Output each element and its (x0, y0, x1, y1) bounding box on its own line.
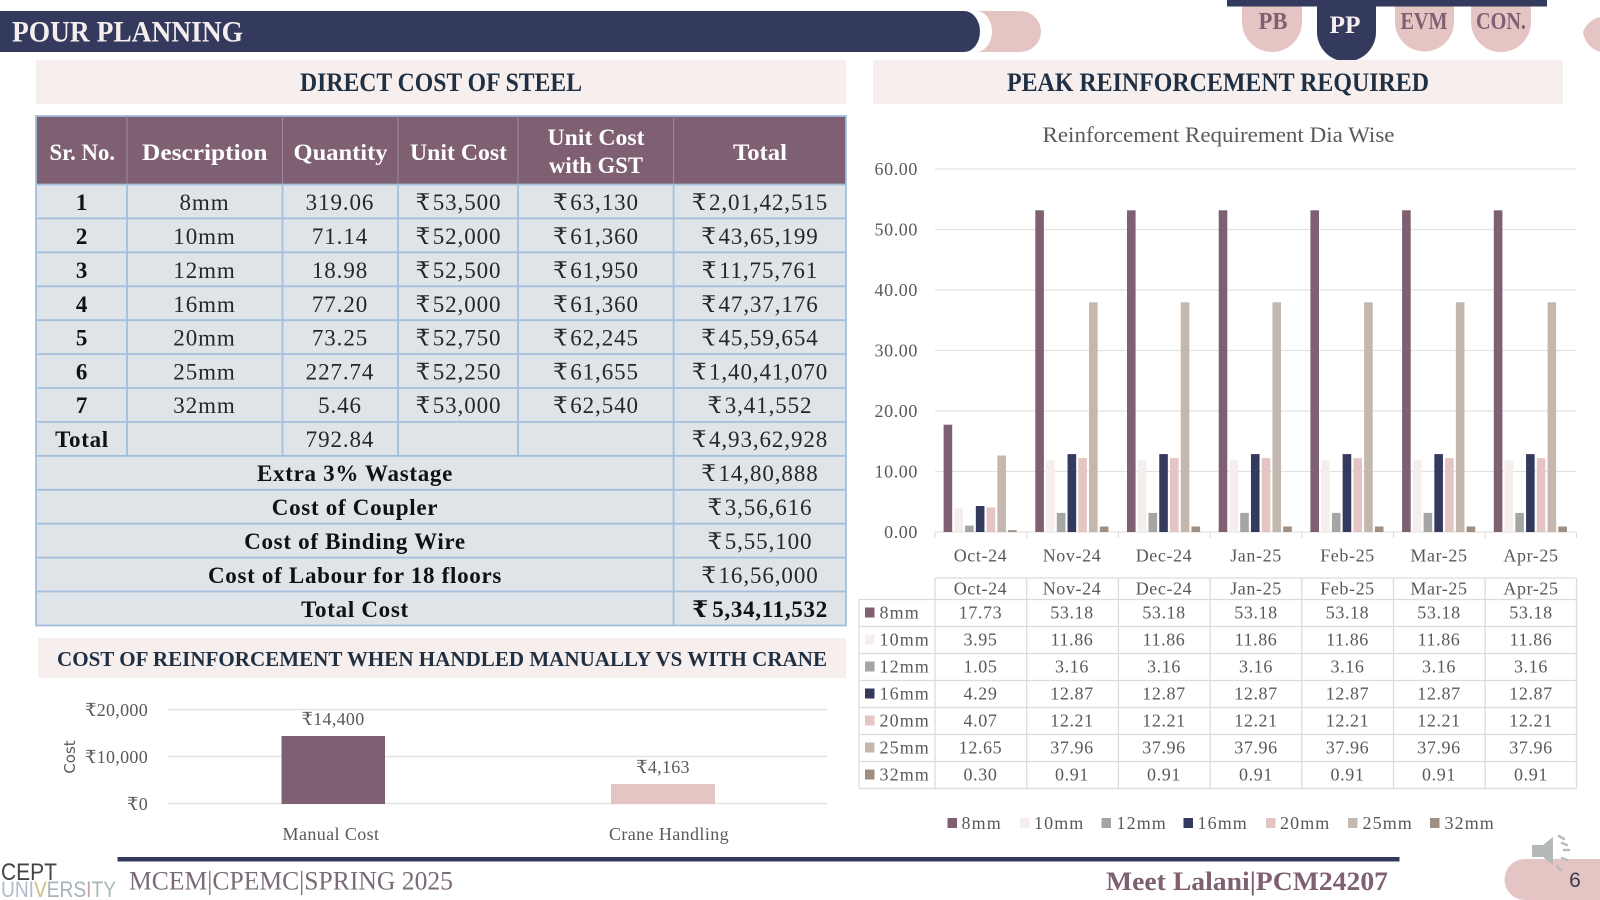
y axis labels: 0.00 (884, 522, 918, 542)
x axis labels (954, 546, 1559, 566)
labour row (208, 563, 819, 588)
heading: peak reinforcement required: PEAK REINFORCEMENT REQUIRED (1007, 68, 1429, 97)
navigation tabs: EVM (1400, 9, 1448, 35)
32mm row: 0.91 (1514, 764, 1548, 784)
row 1: ₹ 2,01,42,515 (692, 190, 828, 215)
bars Oct-24 (944, 425, 1017, 532)
row 3: ₹ 61,950 (553, 258, 639, 283)
16mm row: 4.29 (964, 684, 997, 704)
bars Dec-24 (1127, 210, 1200, 532)
category labels: Crane Handling (609, 824, 729, 844)
x axis labels: Dec-24 (1136, 546, 1192, 566)
total row: Total (55, 427, 109, 452)
25mm row: 12.65 (959, 738, 1002, 758)
32mm row: 0.91 (1331, 764, 1364, 784)
row 4: 77.20 (312, 292, 368, 317)
bar chart: manual vs crane cost (61, 700, 827, 844)
row 7: ₹ 3,41,552 (708, 393, 812, 418)
x axis labels: Feb-25 (1320, 546, 1375, 566)
x axis labels: Apr-25 (1503, 546, 1559, 566)
25mm row: 37.96 (1326, 738, 1369, 758)
row 2: ₹ 43,65,199 (701, 224, 819, 249)
y axis labels: 30.00 (874, 340, 918, 360)
row 5: ₹ 62,245 (553, 326, 639, 350)
page number pill: 6 (1569, 869, 1581, 892)
8mm row: 53.18 (1417, 602, 1461, 622)
row 4: ₹ 52,000 (416, 292, 501, 317)
x axis labels: Mar-25 (1410, 546, 1468, 566)
12mm row: 1.05 (964, 656, 997, 676)
heading: manual vs crane: COST OF REINFORCEMENT WHEN HANDLED MANUALLY VS WITH CRANE (57, 647, 827, 671)
table header row: Unit Cost (548, 125, 645, 150)
chart legend: 10mm (1034, 813, 1084, 833)
title bar: POUR PLANNING (12, 16, 243, 48)
axis labels: ₹10,000 (85, 747, 148, 767)
16mm row: 12.87 (1417, 684, 1461, 704)
y axis labels: 60.00 (874, 159, 918, 179)
25mm row: 37.96 (1234, 738, 1278, 758)
title bar (0, 11, 1041, 52)
table header row: Total (733, 140, 787, 165)
row 2 (76, 224, 819, 249)
heading: direct cost of steel (36, 60, 846, 104)
data table header: Oct-24 (954, 578, 1007, 598)
row 3: ₹ 11,75,761 (702, 258, 818, 283)
data labels: ₹4,163 (636, 757, 690, 777)
20mm row: 12.21 (1417, 710, 1461, 730)
32mm row: 0.91 (1055, 764, 1089, 784)
extra wastage row (257, 461, 819, 486)
axis labels: ₹20,000 (85, 700, 148, 720)
table: direct cost of steel (36, 116, 846, 626)
25mm row: 37.96 (1509, 738, 1553, 758)
10mm row: 11.86 (1051, 630, 1093, 650)
8mm row: 8mm (880, 602, 920, 622)
navigation tabs: PB (1258, 9, 1288, 35)
icon: speaker (1532, 836, 1569, 870)
binding wire row (244, 529, 812, 554)
row 6: ₹ 61,655 (553, 360, 639, 384)
16mm row: 12.87 (1509, 684, 1553, 704)
16mm row: 12.87 (1142, 684, 1186, 704)
navigation tabs: CON. (1476, 9, 1526, 35)
heading: manual vs crane (38, 638, 846, 678)
page number pill (1504, 859, 1600, 900)
chart legend: 8mm (962, 813, 1002, 833)
10mm row: 10mm (880, 630, 930, 650)
25mm row: 37.96 (1142, 738, 1186, 758)
table header row: Description (142, 140, 268, 165)
25mm row (865, 738, 1553, 758)
category labels (283, 824, 729, 844)
8mm row: 17.73 (959, 602, 1002, 622)
32mm row: 0.30 (964, 764, 997, 784)
chart legend: 25mm (1362, 813, 1413, 833)
12mm row: 3.16 (1331, 656, 1364, 676)
12mm row: 12mm (880, 656, 930, 676)
32mm row: 0.91 (1147, 764, 1181, 784)
8mm row: 53.18 (1509, 602, 1553, 622)
total cost row (301, 597, 828, 622)
16mm row: 12.87 (1050, 684, 1094, 704)
row 6: 227.74 (306, 360, 374, 384)
row 4: ₹ 47,37,176 (701, 292, 819, 317)
data table header: Mar-25 (1410, 578, 1468, 598)
x axis labels: Nov-24 (1043, 546, 1101, 566)
total cost row: Total Cost (301, 597, 409, 622)
row 4: 4 (76, 292, 88, 317)
logo: CEPT University: CEPT (1, 859, 57, 886)
table header row: Sr. No. (50, 140, 115, 165)
row 6: 25mm (173, 360, 236, 384)
20mm row: 12.21 (1234, 710, 1278, 730)
data table header: Dec-24 (1136, 578, 1192, 598)
row 4: ₹ 61,360 (553, 292, 639, 317)
row 2: 71.14 (312, 224, 368, 249)
row 4 (76, 292, 819, 317)
row 2: 2 (76, 224, 88, 249)
8mm row: 53.18 (1050, 602, 1094, 622)
10mm row: 11.86 (1235, 630, 1277, 650)
row 3: 18.98 (312, 258, 368, 283)
10mm row: 3.95 (964, 630, 997, 650)
row 5: ₹ 45,59,654 (701, 326, 819, 350)
25mm row: 37.96 (1050, 738, 1094, 758)
row 5 (76, 326, 819, 350)
data table header (954, 578, 1559, 598)
binding wire row: ₹ 5,55,100 (708, 529, 812, 554)
row 1: ₹ 53,500 (416, 190, 501, 215)
bars Apr-25 (1494, 210, 1567, 532)
row 3: 12mm (173, 258, 236, 283)
bars Mar-25 (1402, 210, 1475, 532)
binding wire row: Cost of Binding Wire (244, 529, 466, 554)
bars Jan-25 (1219, 210, 1292, 532)
chart legend: 12mm (1116, 813, 1167, 833)
32mm row: 32mm (880, 764, 930, 784)
row 6: ₹ 1,40,41,070 (692, 360, 828, 384)
row 3: ₹ 52,500 (416, 258, 501, 283)
20mm row: 12.21 (1142, 710, 1186, 730)
8mm row (865, 602, 1553, 622)
20mm row: 12.21 (1326, 710, 1369, 730)
16mm row: 12.87 (1326, 684, 1369, 704)
row 5: 20mm (173, 326, 236, 350)
row 7: ₹ 53,000 (416, 393, 501, 418)
12mm row: 3.16 (1422, 656, 1456, 676)
row 2: ₹ 61,360 (553, 224, 639, 249)
y axis labels: 50.00 (874, 220, 918, 240)
footer rule (118, 857, 1400, 862)
16mm row: 12.87 (1234, 684, 1278, 704)
chart title: Reinforcement Requirement Dia Wise (1042, 122, 1394, 147)
12mm row: 3.16 (1147, 656, 1181, 676)
chart legend: 20mm (1280, 813, 1330, 833)
total row (55, 427, 828, 452)
y axis labels (874, 159, 918, 542)
20mm row: 12.21 (1509, 710, 1553, 730)
10mm row: 11.86 (1418, 630, 1460, 650)
navigation tabs: PP (1330, 12, 1360, 39)
16mm row (865, 684, 1553, 704)
row 6: 6 (76, 360, 88, 384)
row 7: 32mm (173, 393, 236, 418)
coupler row (272, 495, 812, 520)
extra wastage row: Extra 3% Wastage (257, 461, 453, 486)
32mm row: 0.91 (1239, 764, 1273, 784)
table header row: Unit Cost (410, 140, 507, 165)
data table header: Nov-24 (1043, 578, 1101, 598)
chart legend: 32mm (1444, 813, 1495, 833)
table header row: Quantity (294, 140, 388, 165)
25mm row: 25mm (880, 738, 930, 758)
row 7: 7 (76, 393, 88, 418)
10mm row: 11.86 (1143, 630, 1185, 650)
row 3: 3 (76, 258, 88, 283)
x axis labels: Jan-25 (1230, 546, 1282, 566)
20mm row: 12.21 (1050, 710, 1094, 730)
data table header: Jan-25 (1230, 578, 1282, 598)
row 7: ₹ 62,540 (553, 393, 639, 418)
table header row: with GST (549, 153, 643, 178)
row 7: 5.46 (318, 393, 362, 418)
category labels: Manual Cost (283, 824, 379, 844)
row 2: 10mm (173, 224, 236, 249)
y axis labels: 10.00 (874, 462, 918, 482)
8mm row: 53.18 (1234, 602, 1278, 622)
row 1: 1 (76, 190, 88, 215)
10mm row: 11.86 (1326, 630, 1369, 650)
labour row: Cost of Labour for 18 floors (208, 563, 502, 588)
data labels (301, 709, 690, 777)
row 6 (76, 360, 828, 384)
x axis labels: Oct-24 (954, 546, 1007, 566)
extra wastage row: ₹ 14,80,888 (701, 461, 819, 486)
row 2: ₹ 52,000 (416, 224, 501, 249)
bar: crane handling (611, 784, 715, 804)
row 1: ₹ 63,130 (553, 190, 639, 215)
20mm row (865, 710, 1553, 730)
logo: CEPT University (1, 859, 116, 900)
coupler row: Cost of Coupler (272, 495, 438, 520)
row 1 (76, 190, 828, 215)
12mm row: 3.16 (1239, 656, 1273, 676)
axis labels: ₹0 (127, 794, 148, 814)
total row: ₹ 4,93,62,928 (692, 427, 828, 452)
data labels: ₹14,400 (301, 709, 365, 729)
row 6: ₹ 52,250 (416, 360, 501, 384)
data table header: Apr-25 (1503, 578, 1559, 598)
row 1: 8mm (180, 190, 229, 215)
10mm row (865, 630, 1552, 650)
axis labels (85, 700, 148, 814)
bars Feb-25 (1310, 210, 1384, 532)
row 3 (76, 258, 818, 283)
16mm row: 16mm (880, 684, 930, 704)
heading: direct cost of steel: DIRECT COST OF STEEL (300, 68, 582, 97)
row 5: 5 (76, 326, 88, 350)
table header row (50, 125, 787, 178)
8mm row: 53.18 (1326, 602, 1369, 622)
20mm row: 20mm (880, 710, 930, 730)
32mm row: 0.91 (1422, 764, 1456, 784)
row 5: 73.25 (312, 326, 368, 350)
12mm row: 3.16 (1514, 656, 1548, 676)
bar: manual cost (282, 736, 385, 804)
footer course text: MCEM|CPEMC|SPRING 2025 (129, 866, 453, 896)
row 7 (76, 393, 812, 418)
chart legend: 16mm (1198, 813, 1248, 833)
32mm row (865, 764, 1548, 784)
12mm row (865, 656, 1548, 676)
8mm row: 53.18 (1142, 602, 1186, 622)
chart data table (859, 578, 1576, 788)
heading: peak reinforcement required (873, 60, 1563, 104)
bars Nov-24 (1035, 210, 1108, 532)
navigation tabs (1227, 0, 1600, 62)
chart legend (948, 813, 1495, 833)
data table header: Feb-25 (1320, 578, 1375, 598)
axis title: Cost (61, 740, 79, 774)
total cost row: ₹ 5,34,11,532 (692, 597, 828, 622)
y axis labels: 20.00 (874, 401, 918, 421)
labour row: ₹ 16,56,000 (701, 563, 819, 588)
coupler row: ₹ 3,56,616 (708, 495, 812, 520)
20mm row: 4.07 (964, 710, 997, 730)
footer author text: Meet Lalani|PCM24207 (1106, 867, 1388, 896)
y axis labels: 40.00 (874, 280, 918, 300)
10mm row: 11.86 (1510, 630, 1552, 650)
table grid lines (36, 116, 846, 626)
row 5: ₹ 52,750 (416, 326, 501, 350)
row 4: 16mm (173, 292, 236, 317)
column chart: reinforcement by diameter (874, 159, 1576, 566)
total row: 792.84 (306, 427, 374, 452)
12mm row: 3.16 (1055, 656, 1089, 676)
25mm row: 37.96 (1417, 738, 1461, 758)
row 1: 319.06 (306, 190, 374, 215)
